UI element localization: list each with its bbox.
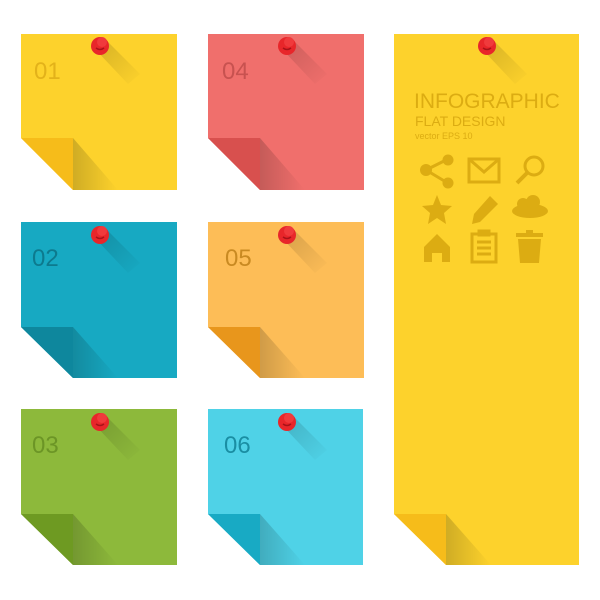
heading: vector EPS 10 xyxy=(415,131,473,141)
icon: pencil xyxy=(472,196,498,224)
icon: share xyxy=(420,154,454,188)
note 01 xyxy=(21,34,177,190)
note 03 xyxy=(21,409,177,565)
icon: trash xyxy=(516,230,543,263)
icon: home xyxy=(424,234,450,262)
tall note xyxy=(394,34,579,565)
pin xyxy=(278,226,327,273)
icon: cloud xyxy=(512,195,548,218)
note 05 xyxy=(208,222,364,378)
pin xyxy=(91,413,140,460)
note 06: 06 xyxy=(224,432,251,459)
heading: FLAT DESIGN xyxy=(415,113,506,129)
heading: INFOGRAPHIC xyxy=(414,90,560,113)
icon: star xyxy=(422,195,452,224)
note 02 xyxy=(21,222,177,378)
note 05: 05 xyxy=(225,245,252,272)
note 02: 02 xyxy=(32,245,59,272)
pin xyxy=(91,37,140,84)
pin xyxy=(278,413,327,460)
icon: search xyxy=(517,157,543,183)
note 04: 04 xyxy=(222,58,249,85)
pin xyxy=(478,37,527,84)
note 03: 03 xyxy=(32,432,59,459)
note 06 xyxy=(208,409,363,565)
heading xyxy=(414,90,560,141)
icon: mail xyxy=(469,159,499,182)
icon: clipboard xyxy=(472,231,496,262)
pin xyxy=(91,226,140,273)
note 04 xyxy=(208,34,364,190)
pin xyxy=(278,37,327,84)
icon grid xyxy=(420,154,548,263)
note 01: 01 xyxy=(34,58,61,85)
